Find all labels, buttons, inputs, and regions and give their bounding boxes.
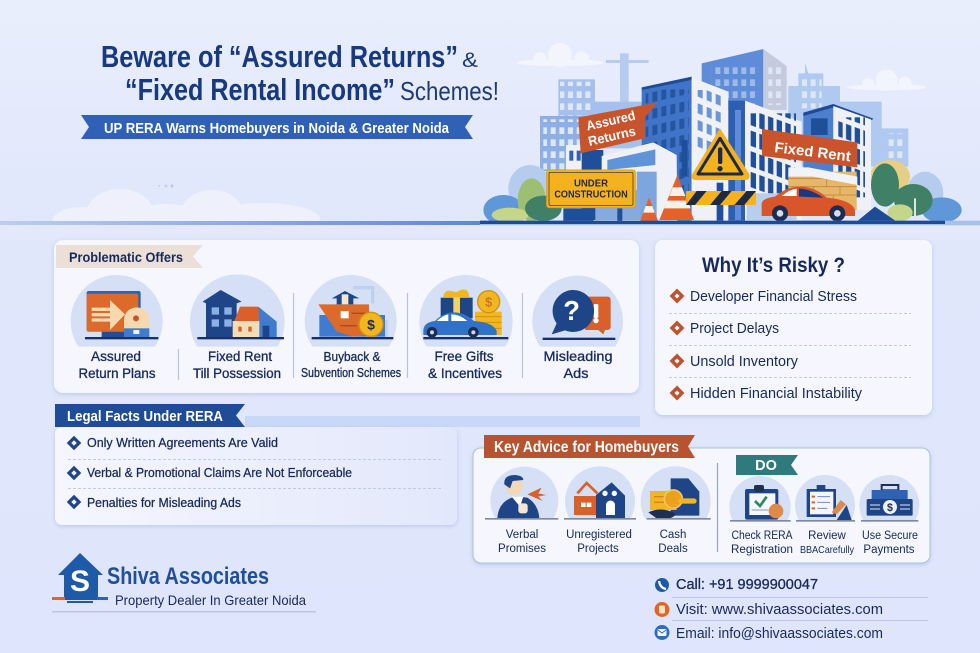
icon: assured return plans bbox=[70, 275, 163, 346]
label: fixed rent bbox=[193, 349, 281, 381]
heading tag: problematic offers: Problematic Offers bbox=[69, 249, 183, 265]
label: misleading ads: Ads bbox=[564, 366, 589, 381]
brick wall bbox=[788, 167, 857, 210]
label: free gifts: Free Gifts bbox=[434, 349, 494, 364]
sign: fixed rent bbox=[762, 129, 857, 167]
icon: cash deals bbox=[640, 466, 711, 520]
heading tag: legal facts: Legal Facts Under RERA bbox=[67, 408, 223, 425]
back skyline bbox=[540, 49, 908, 171]
title: Beware of “Assured Returns” bbox=[101, 39, 458, 74]
clouds bbox=[517, 43, 927, 91]
label: buyback: Buyback & bbox=[324, 350, 381, 364]
label: review BBA: Review bbox=[808, 530, 847, 542]
label: misleading ads: Misleading bbox=[544, 349, 612, 364]
icon: free gifts: $ bbox=[485, 295, 492, 309]
icon: buyback bbox=[304, 275, 397, 346]
tree cluster left bbox=[483, 165, 562, 225]
logo: Shiva Associates: Shiva Associates bbox=[107, 563, 269, 590]
icon: misleading ads: ? bbox=[563, 295, 580, 326]
label: check RERA registration bbox=[731, 530, 793, 556]
DO tag bbox=[736, 455, 798, 475]
heading tag: key advice: Key Advice for Homebuyers bbox=[494, 439, 679, 456]
icon: free gifts bbox=[419, 275, 513, 346]
contact details bbox=[654, 577, 928, 642]
label: assured return plans: Return Plans bbox=[78, 366, 156, 381]
label: misleading ads bbox=[544, 349, 612, 381]
icon: visit bbox=[654, 602, 670, 617]
list: legal facts bbox=[68, 436, 442, 510]
label: fixed rent: Fixed Rent bbox=[208, 349, 272, 364]
title: Schemes! bbox=[400, 76, 499, 106]
ground line bbox=[0, 221, 980, 240]
background clouds bbox=[52, 184, 320, 242]
icon: email bbox=[654, 625, 670, 640]
main building left bbox=[642, 77, 728, 221]
label: free gifts bbox=[428, 349, 502, 381]
tree cluster right bbox=[857, 160, 962, 223]
title bbox=[101, 39, 499, 107]
car bbox=[762, 187, 855, 221]
ground bar bbox=[480, 221, 980, 225]
label: verbal promises: Verbal bbox=[506, 529, 538, 541]
list: legal facts: Only Written Agreements Are Valid bbox=[87, 436, 278, 450]
icon: verbal promises bbox=[485, 466, 558, 520]
label: unregistered projects: Projects bbox=[577, 543, 619, 555]
label: secure payments: Use Secure bbox=[862, 530, 918, 542]
label: check RERA registration: Registration bbox=[731, 544, 793, 556]
sign: fixed rent: Fixed Rent bbox=[774, 140, 852, 165]
list: legal facts: Penalties for Misleading Ads bbox=[87, 496, 241, 510]
label: check RERA registration: Check RERA bbox=[732, 530, 793, 542]
label: review BBA: BBACarefully bbox=[800, 544, 855, 556]
text: phone: Call: +91 9999900047 bbox=[676, 577, 818, 593]
list: risks bbox=[669, 289, 911, 402]
DO tag: DO bbox=[755, 458, 777, 474]
sign: under construction: CONSTRUCTION bbox=[554, 190, 628, 201]
fence and doors bbox=[563, 183, 723, 221]
subtitle ribbon: UP RERA Warns Homebuyers in Noida & Greater Noida bbox=[104, 120, 450, 137]
icon: buyback: $ bbox=[367, 316, 375, 332]
list: risks: Hidden Financial Instability bbox=[690, 386, 863, 402]
icon: unregistered projects bbox=[564, 466, 636, 520]
icon: logo house bbox=[52, 553, 108, 603]
label: verbal promises: Promises bbox=[498, 543, 546, 555]
label: cash deals bbox=[658, 529, 688, 555]
icon: misleading ads bbox=[532, 276, 623, 346]
label: assured return plans bbox=[78, 349, 156, 381]
traffic cones bbox=[639, 175, 694, 223]
list: legal facts: Verbal & Promotional Claims Are Not Enforceable bbox=[87, 466, 352, 480]
heading tag: problematic offers bbox=[56, 245, 203, 268]
label: unregistered projects bbox=[566, 529, 632, 555]
panel: key advice for homebuyers bbox=[473, 435, 930, 563]
panel: why it's risky bbox=[655, 240, 932, 415]
text: email: Email: info@shivaassociates.com bbox=[676, 626, 883, 642]
sign: under construction bbox=[547, 170, 635, 208]
logo: Shiva Associates: Property Dealer In Greater Noida bbox=[115, 592, 306, 608]
label: free gifts: & Incentives bbox=[428, 366, 502, 381]
label: secure payments: Payments bbox=[863, 544, 915, 556]
subtitle ribbon bbox=[81, 115, 473, 139]
icon: fixed rent bbox=[190, 274, 285, 346]
label: cash deals: Cash bbox=[660, 529, 686, 541]
sign: under construction: UNDER bbox=[574, 179, 608, 190]
warning triangle bbox=[692, 128, 750, 180]
heading tag: key advice bbox=[484, 435, 695, 458]
panel: problematic offers bbox=[54, 240, 639, 393]
logo: Shiva Associates bbox=[52, 553, 316, 612]
text: visit: Visit: www.shivaassociates.com bbox=[676, 602, 883, 618]
title: & bbox=[462, 49, 478, 72]
front low building bbox=[566, 142, 677, 221]
building right bbox=[803, 104, 873, 210]
sign: assured returns: Assured bbox=[585, 108, 637, 134]
label: review BBA bbox=[800, 530, 855, 556]
barricade bbox=[686, 191, 756, 205]
label: cash deals: Deals bbox=[658, 543, 688, 555]
list: risks: Project Delays bbox=[690, 321, 779, 337]
sign: assured returns bbox=[578, 103, 657, 153]
icon: secure payments bbox=[859, 475, 920, 522]
panel: legal facts under RERA bbox=[55, 404, 640, 525]
icon: review BBA bbox=[795, 475, 855, 522]
label: buyback: Subvention Schemes bbox=[301, 366, 401, 380]
label: buyback bbox=[301, 350, 401, 380]
label: fixed rent: Till Possession bbox=[193, 366, 281, 381]
label: unregistered projects: Unregistered bbox=[566, 529, 632, 541]
list: risks: Unsold Inventory bbox=[690, 354, 799, 370]
sign: assured returns: Returns bbox=[587, 123, 637, 149]
icon: logo house: S bbox=[70, 565, 90, 598]
heading tag: legal facts bbox=[55, 404, 245, 427]
hero illustration: city skyline with warning signs bbox=[480, 43, 980, 225]
label: secure payments bbox=[862, 530, 918, 556]
main building centre bbox=[728, 101, 802, 221]
heading: why it's risky: Why It’s Risky ? bbox=[702, 254, 845, 277]
title: “Fixed Rental Income” bbox=[125, 72, 395, 107]
icon: phone bbox=[655, 578, 669, 592]
icon: check RERA registration bbox=[729, 476, 791, 522]
label: assured return plans: Assured bbox=[91, 349, 141, 364]
icon: secure payments: $ bbox=[887, 502, 893, 514]
label: verbal promises bbox=[498, 529, 546, 555]
list: risks: Developer Financial Stress bbox=[690, 289, 857, 305]
